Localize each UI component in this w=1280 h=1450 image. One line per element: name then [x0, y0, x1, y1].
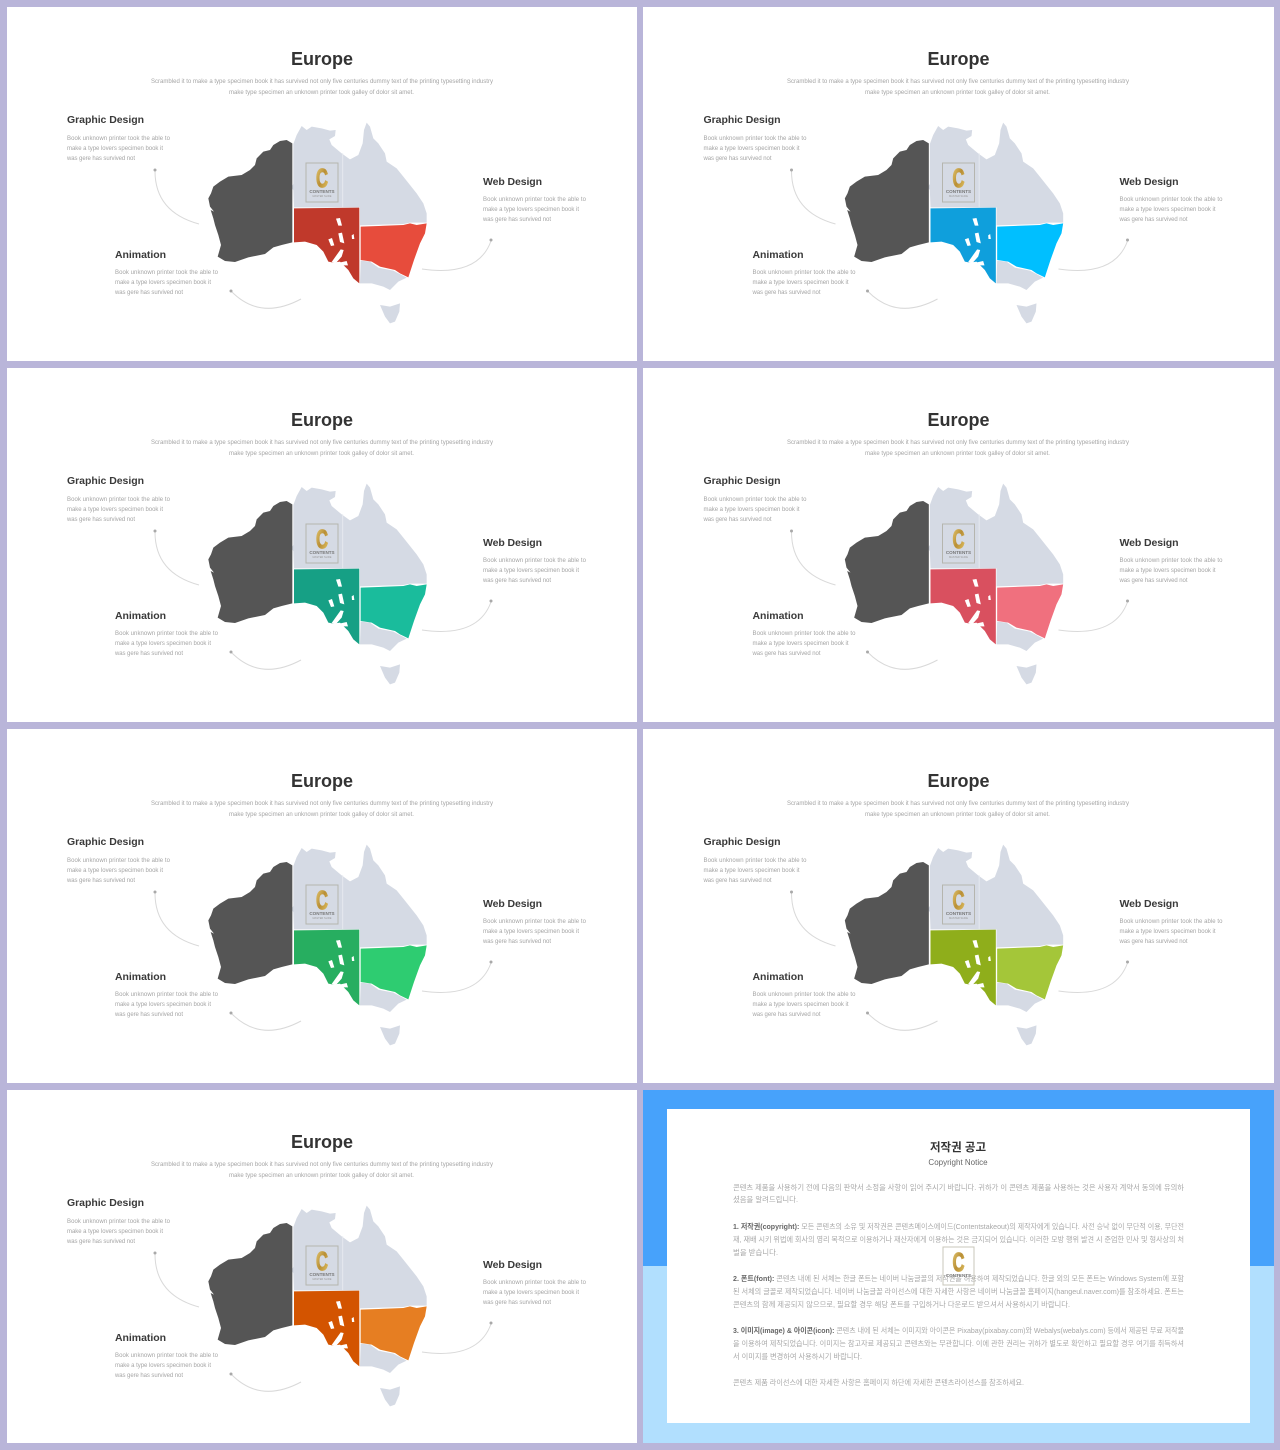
logo: CONTENTS [309, 550, 335, 555]
title: Europe [291, 771, 353, 791]
arrow: graphic design [154, 168, 199, 224]
arrow: animation [866, 1012, 938, 1030]
logo: C [316, 163, 328, 193]
text block: web design: Book unknown printer took the able to [483, 558, 587, 564]
panel: pink map slide [643, 368, 1274, 722]
logo [306, 885, 338, 924]
text block: animation: make a type lovers specimen book it [115, 641, 211, 647]
text block: web design [482, 537, 587, 584]
subtitle [787, 79, 1129, 96]
section 2: font: 2. 폰트(font): 콘텐츠 내에 된 서체는 한글 폰트는 네이버 나눔글꼴의 저작권을 허용하여 제작되었습니다. 한글 외의 모든 폰트는 Windows System에 포함 [733, 1274, 1184, 1283]
logo [943, 1247, 974, 1285]
text block: graphic design: make a type lovers specimen book it [704, 507, 800, 513]
section 1: copyright: 1. 저작권(copyright): 모든 콘텐츠의 소유 및 저작권은 콘텐츠메이스에이드(Contentstakeout)의 제작자에게 있습니다. 사전 승낙 없이 무단적 이용, 무단전 [733, 1222, 1184, 1231]
text block: animation: Book unknown printer took the able to [752, 270, 856, 276]
text block: web design [482, 898, 587, 945]
subtitle: Scrambled it to make a type specimen book it has survived not only five centuries dummy text of the printing typesetting industry [787, 801, 1129, 807]
copyright title: 저작권 공고 [930, 1140, 986, 1154]
logo: MASTER SLIDE [312, 916, 332, 920]
text block: web design: make a type lovers specimen book it [1120, 929, 1216, 935]
text block: animation: Book unknown printer took the able to [115, 1353, 219, 1359]
arrow: graphic design [790, 168, 836, 224]
text block: animation: Animation [115, 610, 166, 622]
title: Europe [291, 410, 353, 430]
arrow: animation [866, 650, 938, 669]
logo: C [316, 1246, 328, 1276]
logo [942, 885, 974, 924]
text block: web design [1118, 537, 1223, 584]
logo [306, 524, 338, 563]
text block: web design: Web Design [483, 176, 542, 188]
title: Europe [927, 49, 990, 69]
text block: web design [1118, 898, 1223, 945]
text block: graphic design: make a type lovers specimen book it [67, 868, 163, 874]
subtitle: Scrambled it to make a type specimen book it has survived not only five centuries dummy text of the printing typesetting industry [151, 801, 493, 807]
text block: web design: Book unknown printer took the able to [1120, 197, 1223, 203]
subtitle: make type specimen an unknown printer took galley of dolor sit amet. [865, 812, 1050, 818]
subtitle: make type specimen an unknown printer took galley of dolor sit amet. [865, 451, 1050, 457]
text block: graphic design: was gere has survived not [66, 878, 135, 884]
text block: graphic design: Graphic Design [704, 114, 780, 126]
text block: animation: make a type lovers specimen book it [115, 280, 211, 286]
text block: animation: was gere has survived not [752, 290, 821, 296]
arrow: web design [422, 600, 492, 631]
text block: web design: make a type lovers specimen book it [483, 929, 579, 935]
text block: graphic design [702, 836, 807, 884]
subtitle: Scrambled it to make a type specimen book it has survived not only five centuries dummy text of the printing typesetting industry [787, 440, 1129, 446]
logo: C [316, 885, 328, 915]
section 2: font: 콘텐츠의 함께 제공되지 않으므로, 필요할 경우 해당 폰트를 구입하거나 다운로드 받으셔서 사용하시기 바랍니다. [733, 1300, 1070, 1309]
panel: green map slide [7, 729, 637, 1083]
text block: web design: Book unknown printer took the able to [1120, 558, 1223, 564]
text block: web design: was gere has survived not [482, 939, 551, 945]
text block: animation [114, 610, 219, 657]
text block: graphic design [66, 114, 171, 162]
text block: web design: was gere has survived not [1118, 217, 1188, 223]
text block: web design: Web Design [1120, 176, 1178, 188]
text block: animation [114, 1332, 219, 1379]
arrow: web design [1058, 960, 1129, 992]
arrow: animation [230, 1012, 301, 1030]
arrow: graphic design [154, 530, 199, 585]
panel: teal map slide [7, 368, 637, 722]
intro paragraph [733, 1183, 1184, 1204]
text block: web design: Book unknown printer took the able to [483, 1280, 587, 1286]
text block: graphic design [702, 114, 807, 162]
logo: C [316, 524, 328, 554]
text block: web design [482, 176, 587, 223]
text block: web design: was gere has survived not [482, 1300, 551, 1306]
text block: web design: Web Design [1120, 537, 1178, 549]
map [208, 845, 427, 1045]
text block: web design: make a type lovers specimen book it [483, 1290, 579, 1296]
arrow: animation [866, 290, 938, 308]
text block: web design: Book unknown printer took the able to [483, 197, 587, 203]
text block: animation: make a type lovers specimen book it [115, 1363, 211, 1369]
text block: graphic design: Book unknown printer took the able to [67, 497, 171, 503]
logo: CONTENTS [309, 911, 335, 916]
text block: graphic design: Book unknown printer took the able to [67, 1219, 171, 1225]
logo: CONTENTS [946, 1273, 971, 1278]
title: Europe [927, 410, 990, 430]
text block: graphic design: Book unknown printer took the able to [704, 858, 807, 864]
closing note: 콘텐츠 제품 라이선스에 대한 자세한 사항은 홈페이지 하단에 자세한 콘텐츠라이선스를 참조하세요. [733, 1378, 1024, 1387]
arrow: graphic design [790, 890, 836, 946]
map [208, 484, 427, 684]
logo: C [952, 524, 965, 554]
text block: graphic design: was gere has survived not [702, 156, 772, 162]
logo: CONTENTS [946, 550, 971, 555]
text block: animation: was gere has survived not [752, 651, 821, 657]
text block: animation: make a type lovers specimen book it [752, 280, 849, 286]
text block: animation: Animation [115, 1332, 166, 1344]
logo: CONTENTS [309, 189, 335, 194]
arrow: graphic design [154, 890, 199, 946]
text block: graphic design: Book unknown printer took the able to [67, 136, 171, 142]
subtitle [151, 1162, 493, 1179]
text block: web design [482, 1259, 587, 1306]
subtitle [151, 440, 493, 457]
map [845, 123, 1063, 323]
text block: graphic design: make a type lovers specimen book it [704, 146, 800, 152]
logo: CONTENTS [946, 911, 971, 916]
logo: CONTENTS [309, 1272, 335, 1277]
panel: orange map slide [7, 1090, 637, 1443]
subtitle: Scrambled it to make a type specimen book it has survived not only five centuries dummy text of the printing typesetting industry [151, 1162, 493, 1168]
title: Europe [927, 771, 990, 791]
arrow: graphic design [790, 530, 836, 585]
subtitle: make type specimen an unknown printer took galley of dolor sit amet. [229, 90, 414, 96]
logo: C [952, 885, 965, 915]
arrow: web design [1058, 238, 1129, 270]
text block: graphic design: was gere has survived not [66, 156, 135, 162]
text block: web design: make a type lovers specimen book it [1120, 207, 1216, 213]
text block: animation: Book unknown printer took the able to [752, 992, 856, 998]
subtitle: Scrambled it to make a type specimen book it has survived not only five centuries dummy text of the printing typesetting industry [151, 79, 493, 85]
section 3: image and icon: 서 이미지를 변경하여 사용하시기 바랍니다. [733, 1352, 862, 1361]
section 1: copyright: 벌을 받습니다. [733, 1248, 778, 1257]
logo: MASTER SLIDE [312, 1277, 332, 1281]
text block: graphic design: make a type lovers specimen book it [704, 868, 800, 874]
text block: graphic design: Book unknown printer took the able to [67, 858, 171, 864]
subtitle [787, 801, 1129, 818]
subtitle: Scrambled it to make a type specimen book it has survived not only five centuries dummy text of the printing typesetting industry [151, 440, 493, 446]
logo: C [952, 1247, 965, 1277]
arrow: animation [230, 650, 301, 669]
text block: animation: was gere has survived not [752, 1012, 821, 1018]
text block: web design: Web Design [1120, 898, 1178, 910]
text block: web design [1118, 176, 1223, 223]
text block: animation: Animation [752, 971, 804, 983]
text block: animation: Animation [752, 249, 804, 261]
text block: web design: make a type lovers specimen book it [483, 568, 579, 574]
text block: animation: Book unknown printer took the able to [752, 631, 856, 637]
text block: graphic design [66, 836, 171, 884]
text block: web design: was gere has survived not [1118, 939, 1188, 945]
logo: MASTER SLIDE [312, 555, 332, 559]
arrow: animation [230, 1372, 301, 1391]
text block: animation [752, 610, 856, 657]
text block: animation: make a type lovers specimen book it [115, 1002, 211, 1008]
text block: graphic design: Graphic Design [704, 836, 780, 848]
map [208, 1206, 427, 1406]
subtitle [151, 79, 493, 96]
map [208, 123, 427, 323]
logo [306, 163, 338, 202]
subtitle: make type specimen an unknown printer took galley of dolor sit amet. [229, 1173, 414, 1179]
text block: animation: Animation [115, 249, 166, 261]
section 1: copyright [733, 1222, 1184, 1257]
text block: web design: make a type lovers specimen book it [1120, 568, 1216, 574]
text block: graphic design: make a type lovers specimen book it [67, 507, 163, 513]
logo: MASTER SLIDE [949, 555, 968, 559]
text block: graphic design: Graphic Design [67, 836, 144, 848]
arrow: web design [422, 1322, 492, 1353]
section 2: font [733, 1274, 1184, 1309]
intro paragraph: 콘텐츠 제품을 사용하기 전에 다음의 판약서 소정을 사항이 읽어 주시기 바랍니다. 귀하가 이 콘텐츠 제품을 사용하는 것은 사용자 계약서 동의에 유의하 [733, 1183, 1184, 1192]
text block: graphic design: Book unknown printer took the able to [704, 497, 807, 503]
text block: animation: Animation [752, 610, 804, 622]
logo [942, 163, 974, 202]
arrow: web design [422, 238, 492, 270]
section 3: image and icon: 3. 이미지(image) & 아이콘(icon): 콘텐츠 내에 된 서체는 이미지와 아이콘은 Pixabay(pixabay.com)와 Webalys(webalys.com) 등에서 제공된 무료 저작물 [733, 1326, 1184, 1335]
text block: web design: was gere has survived not [1118, 578, 1188, 584]
text block: animation: make a type lovers specimen book it [752, 641, 849, 647]
text block: web design: Web Design [483, 898, 542, 910]
copyright subtitle: Copyright Notice [928, 1158, 988, 1167]
text block: graphic design: make a type lovers specimen book it [67, 1229, 163, 1235]
section 3: image and icon [733, 1326, 1184, 1361]
text block: graphic design [66, 475, 171, 523]
subtitle: Scrambled it to make a type specimen book it has survived not only five centuries dummy text of the printing typesetting industry [787, 79, 1129, 85]
panel: copyright notice [643, 1090, 1274, 1443]
title: Europe [291, 49, 353, 69]
text block: animation: Book unknown printer took the able to [115, 992, 219, 998]
text block: graphic design: was gere has survived not [66, 1239, 135, 1245]
text block: web design: was gere has survived not [482, 578, 551, 584]
panel: olive map slide [643, 729, 1274, 1083]
logo [306, 1246, 338, 1285]
logo: CONTENTS [946, 189, 971, 194]
text block: graphic design: was gere has survived not [702, 517, 772, 523]
text block: graphic design [702, 475, 807, 523]
text block: graphic design: make a type lovers specimen book it [67, 146, 163, 152]
text block: animation: was gere has survived not [114, 651, 183, 657]
text block: animation: Animation [115, 971, 166, 983]
text block: animation: was gere has survived not [114, 290, 183, 296]
section 3: image and icon: 을 이용하여 제작되었습니다. 이미지는 참고자료 제공되고 콘텐츠와는 무관합니다. 이에 관한 권리는 귀하가 별도로 확인하고 필요할 경우 여기를 취득하셔 [733, 1339, 1184, 1348]
text block: graphic design [66, 1197, 171, 1245]
text block: web design: Web Design [483, 537, 542, 549]
logo [942, 524, 974, 563]
logo: MASTER SLIDE [949, 194, 968, 198]
logo: C [952, 163, 965, 193]
text block: web design: Web Design [483, 1259, 542, 1271]
subtitle: make type specimen an unknown printer took galley of dolor sit amet. [229, 812, 414, 818]
panel: red map slide [7, 7, 637, 361]
text block: animation: was gere has survived not [114, 1012, 183, 1018]
arrow: web design [422, 960, 492, 992]
text block: graphic design: Graphic Design [704, 475, 780, 487]
arrow: animation [230, 290, 301, 308]
section 2: font: 된 서체의 글꼴로 제작되었습니다. 네이버 나눔글꼴 라이선스에 대한 자세한 사항은 네이버 나눔글꼴 홈페이지(hangeul.naver.com)를 참조하세요. 폰트는 [733, 1287, 1184, 1296]
text block: graphic design: Graphic Design [67, 114, 144, 126]
text block: animation: make a type lovers specimen book it [752, 1002, 849, 1008]
logo: MASTER SLIDE [312, 194, 332, 198]
arrow: web design [1058, 600, 1129, 631]
intro paragraph: 셨음을 알려드립니다. [733, 1195, 798, 1204]
text block: graphic design: was gere has survived not [66, 517, 135, 523]
text block: graphic design: was gere has survived not [702, 878, 772, 884]
text block: web design: make a type lovers specimen book it [483, 207, 579, 213]
text block: web design: Book unknown printer took the able to [1120, 919, 1223, 925]
title: Europe [291, 1132, 353, 1152]
text block: graphic design: Book unknown printer took the able to [704, 136, 807, 142]
text block: graphic design: Graphic Design [67, 1197, 144, 1209]
subtitle: make type specimen an unknown printer took galley of dolor sit amet. [865, 90, 1050, 96]
logo: MASTER SLIDE [949, 916, 968, 920]
text block: animation [114, 249, 219, 296]
map [845, 484, 1063, 684]
text block: animation [114, 971, 219, 1018]
text block: web design: Book unknown printer took the able to [483, 919, 587, 925]
section 1: copyright: 재, 재배 시키 위법에 회사의 영리 목적으로 이용하거나 재산자에게 이용하는 것은 금지되어 있습니다. 이러한 모방 행위 발견 시 준엄한 민사 및 형사상의 처 [733, 1235, 1184, 1244]
map [845, 845, 1063, 1045]
text block: animation [752, 249, 856, 296]
text block: animation [752, 971, 856, 1018]
text block: graphic design: Graphic Design [67, 475, 144, 487]
subtitle [151, 801, 493, 818]
arrow: graphic design [154, 1252, 199, 1307]
panel: blue map slide [643, 7, 1274, 361]
subtitle: make type specimen an unknown printer took galley of dolor sit amet. [229, 451, 414, 457]
text block: animation: Book unknown printer took the able to [115, 270, 219, 276]
text block: animation: was gere has survived not [114, 1373, 183, 1379]
text block: web design: was gere has survived not [482, 217, 551, 223]
text block: animation: Book unknown printer took the able to [115, 631, 219, 637]
subtitle [787, 440, 1129, 457]
